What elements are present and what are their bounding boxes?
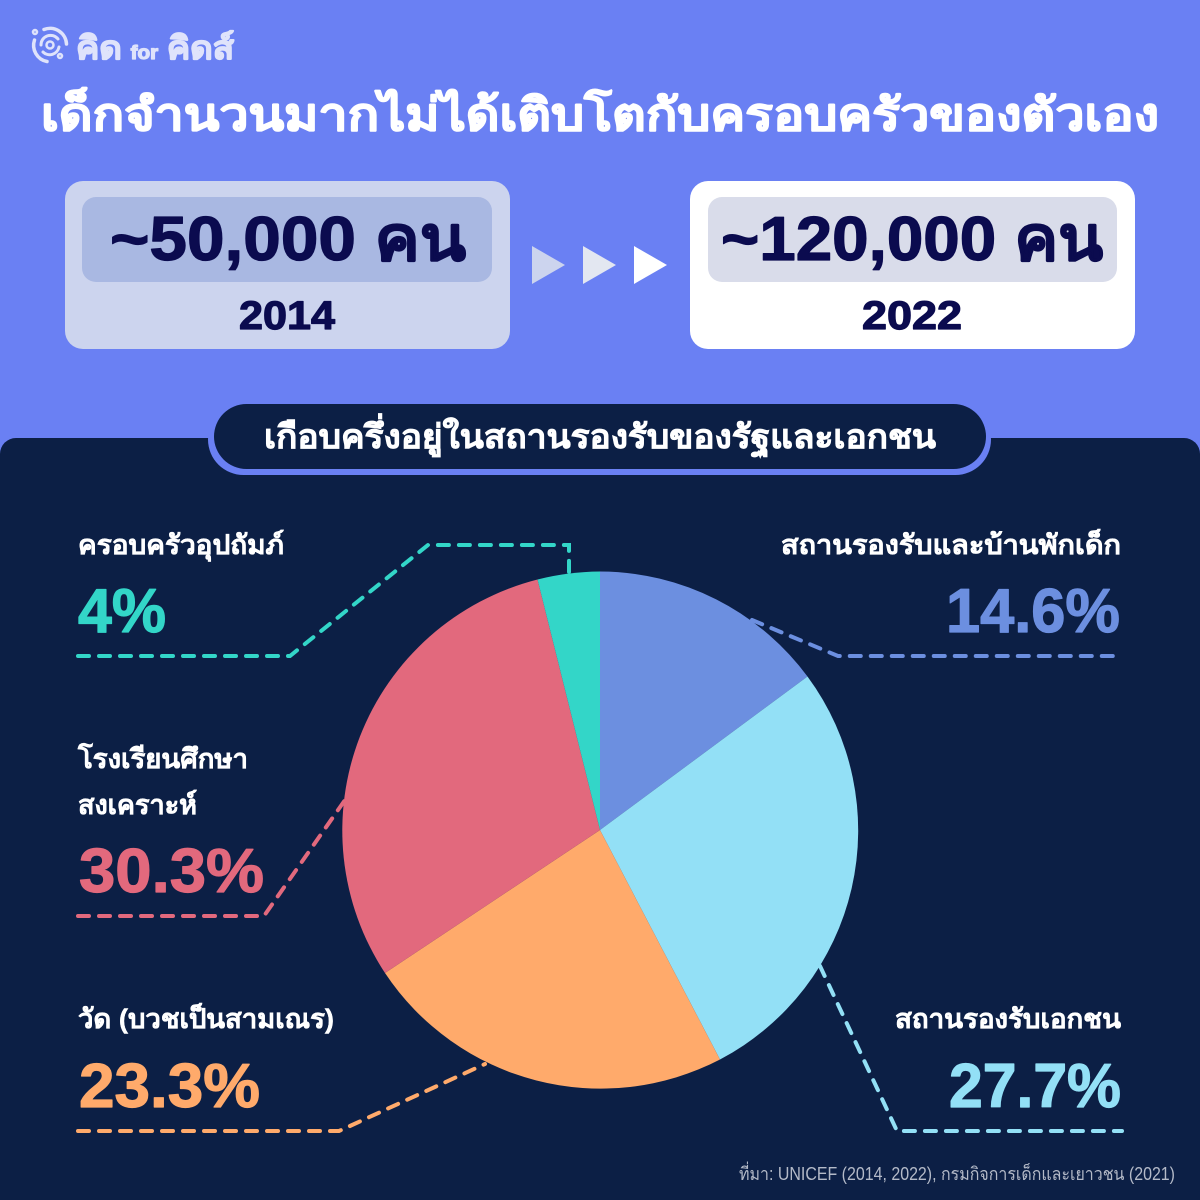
logo text: คิด for คิดส์	[76, 30, 235, 66]
callout: welfare schools	[77, 742, 345, 916]
callout: foster families: ครอบครัวอุปถัมภ์	[78, 529, 284, 562]
logo	[33, 28, 235, 66]
year: 2014: 2014	[239, 294, 336, 338]
callout: shelters and children's homes: 14.6%	[946, 577, 1120, 646]
title: เด็กจำนวนมากไม่ได้เติบโตกับครอบครัวของตัวเอง	[41, 87, 1159, 140]
callout: welfare schools: โรงเรียนศึกษา	[77, 742, 248, 774]
callout: private shelters: 27.7%	[949, 1052, 1121, 1121]
panel: dark lower background	[0, 438, 1200, 1200]
subtitle text: เกือบครึ่งอยู่ในสถานรองรับของรัฐและเอกชน	[264, 413, 936, 458]
panel: 2014 stat	[65, 181, 510, 349]
icon: logo mark	[33, 28, 66, 62]
stat: 50,000: ~50,000 คน	[110, 205, 466, 274]
callout: temples	[78, 1001, 485, 1131]
callout: private shelters	[820, 966, 1122, 1131]
year: 2022: 2022	[862, 294, 962, 338]
panel: 2022 stat	[690, 181, 1135, 349]
callout: foster families: 4%	[78, 577, 166, 646]
arrows	[532, 246, 667, 284]
slice: temples 23.3%	[385, 830, 720, 1089]
subtitle pill	[208, 404, 991, 475]
slice: welfare schools 30.3%	[342, 580, 600, 973]
slice: shelters and children's homes 14.6%	[600, 572, 808, 830]
stat: 120,000: ~120,000 คน	[721, 205, 1103, 274]
slice: private shelters 27.7%	[600, 676, 858, 1060]
pie chart	[342, 572, 858, 1089]
slice: foster families 4%	[538, 572, 600, 830]
callout: welfare schools: สงเคราะห์	[78, 789, 197, 820]
callout: temples: 23.3%	[79, 1052, 260, 1121]
callout: foster families	[78, 529, 569, 656]
callout: shelters and children's homes: สถานรองรับและบ้านพักเด็ก	[781, 527, 1121, 560]
callout: welfare schools: 30.3%	[79, 837, 264, 906]
callout: shelters and children's homes	[752, 527, 1122, 656]
callout: private shelters: สถานรองรับเอกชน	[895, 1004, 1122, 1034]
callout: temples: วัด (บวชเป็นสามเณร)	[78, 1001, 334, 1034]
